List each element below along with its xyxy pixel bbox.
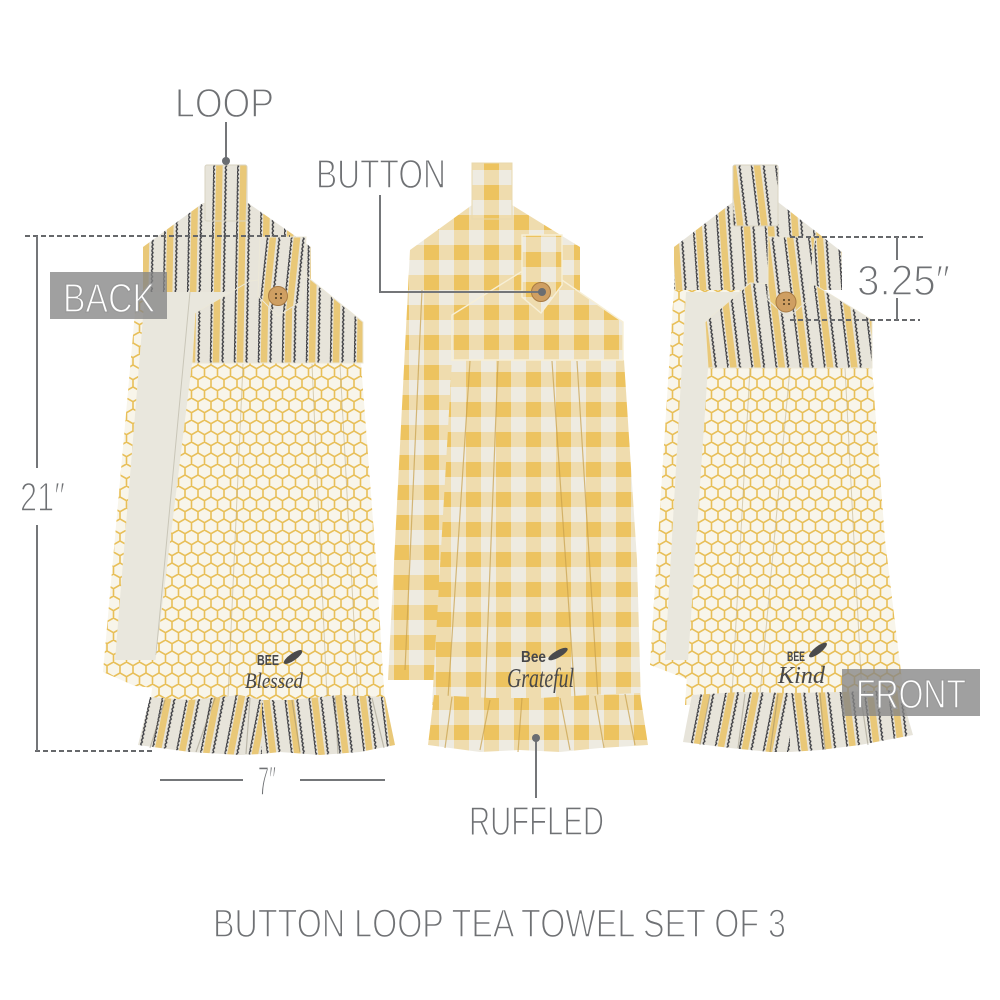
callout: ruffled: [469, 734, 604, 844]
embroidery: Bee Kind: [777, 640, 829, 689]
button: [268, 286, 288, 306]
dimension: 7 inch width: 7″: [258, 758, 276, 804]
towel: Bee Blessed back view: [103, 165, 311, 690]
embroidery: Bee Blessed: [245, 648, 304, 693]
callout: loop: LOOP: [175, 80, 274, 126]
towel: Bee Grateful back view: [388, 163, 580, 680]
towel: Bee Kind back view: [650, 165, 842, 682]
embroidery: Bee Blessed: BEE: [257, 652, 279, 669]
button: [776, 292, 796, 312]
dimension: 21 inch height: 21″: [20, 474, 65, 520]
callout: button: BUTTON: [316, 151, 446, 197]
embroidery: Bee Kind: BEE: [787, 648, 805, 664]
title: BUTTON LOOP TEA TOWEL SET OF 3: [213, 902, 786, 946]
towel: Bee Kind front view: [683, 237, 913, 752]
embroidery: Bee Grateful: [507, 645, 574, 693]
label: back: BACK: [63, 275, 155, 321]
callout: ruffled: RUFFLED: [469, 798, 604, 844]
callout: button: [316, 151, 546, 296]
button: [532, 282, 550, 302]
embroidery: Bee Blessed: Blessed: [245, 668, 304, 693]
embroidery: Bee Kind: Kind: [777, 663, 826, 689]
towel: Bee Blessed front view: [138, 237, 395, 755]
callout: loop: [175, 80, 274, 165]
dimension: 3.25 inch loop: 3.25″: [857, 257, 950, 305]
embroidery: Bee Grateful: Bee: [521, 649, 546, 666]
embroidery: Bee Grateful: Grateful: [507, 663, 574, 693]
label: front: FRONT: [856, 671, 966, 717]
towel: Bee Grateful front view: [428, 235, 648, 752]
